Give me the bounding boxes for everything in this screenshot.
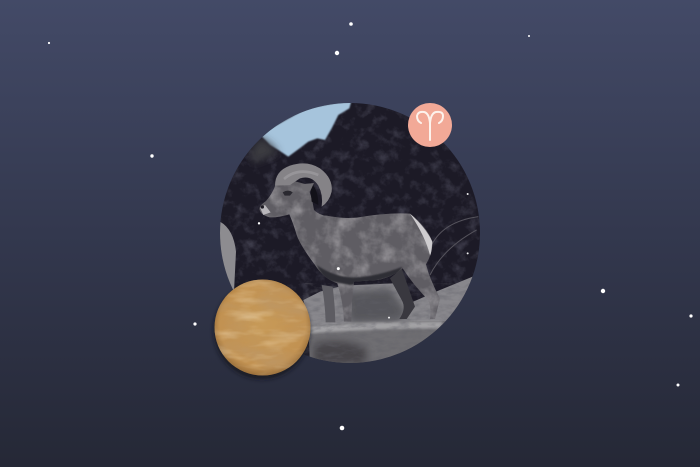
front ledge [308, 321, 447, 365]
left rock [220, 222, 236, 290]
far legs [322, 285, 335, 322]
planet shadow [214, 283, 310, 379]
ear [302, 183, 314, 192]
ram body [257, 178, 443, 325]
icon: Aries badge [408, 103, 452, 147]
eye and face [283, 191, 293, 196]
planet: Venus [210, 275, 315, 380]
stars on photo [258, 222, 260, 224]
middle rocks [303, 276, 472, 326]
dark trees [220, 103, 480, 356]
horn [275, 163, 332, 207]
tree tops left [250, 137, 278, 163]
photo circle: bighorn ram [220, 103, 480, 363]
sky [260, 100, 352, 157]
foliage texture [224, 104, 480, 302]
background branches [430, 217, 478, 275]
